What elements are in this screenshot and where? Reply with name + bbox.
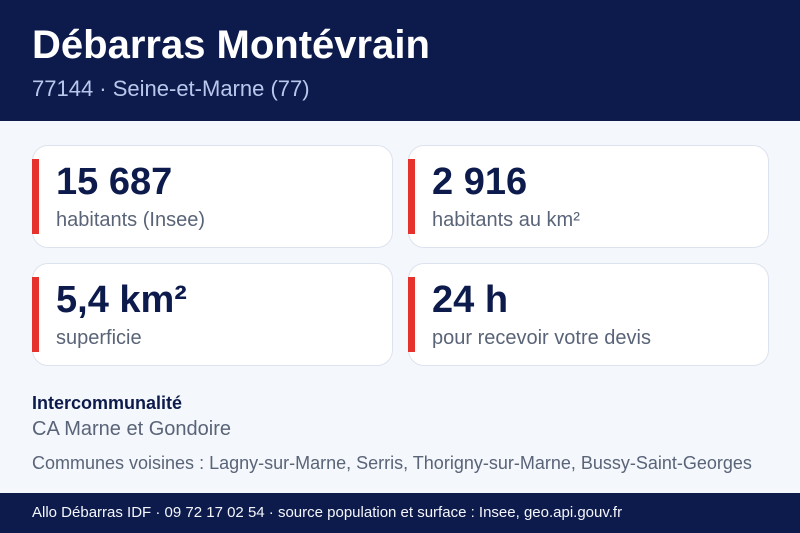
accent bar <box>32 159 39 234</box>
value: 24 h <box>432 279 508 321</box>
label: habitants (Insee) <box>56 209 205 231</box>
label: pour recevoir votre devis <box>432 327 651 349</box>
card: quote delay <box>408 263 769 366</box>
card: density <box>408 145 769 248</box>
neighbouring communes: Communes voisines : Lagny-sur-Marne, Serris, Thorigny-sur-Marne, Bussy-Saint-Georges <box>32 453 752 473</box>
value: 2 916 <box>432 161 527 203</box>
label: superficie <box>56 327 142 349</box>
accent bar <box>408 277 415 352</box>
intercommunality heading: Intercommunalité <box>32 393 182 413</box>
card: population <box>32 145 393 248</box>
accent bar <box>408 159 415 234</box>
value: 15 687 <box>56 161 172 203</box>
accent bar <box>32 277 39 352</box>
subtitle: 77144 · Seine-et-Marne (77) <box>32 76 310 101</box>
title: Débarras Montévrain <box>32 23 430 67</box>
header band <box>0 0 800 121</box>
card: area <box>32 263 393 366</box>
label: habitants au km² <box>432 209 580 231</box>
value: 5,4 km² <box>56 279 187 321</box>
footer band <box>0 493 800 533</box>
footer text: Allo Débarras IDF · 09 72 17 02 54 · source population et surface : Insee, geo.api.gouv.fr <box>32 504 622 521</box>
intercommunality name: CA Marne et Gondoire <box>32 418 231 440</box>
